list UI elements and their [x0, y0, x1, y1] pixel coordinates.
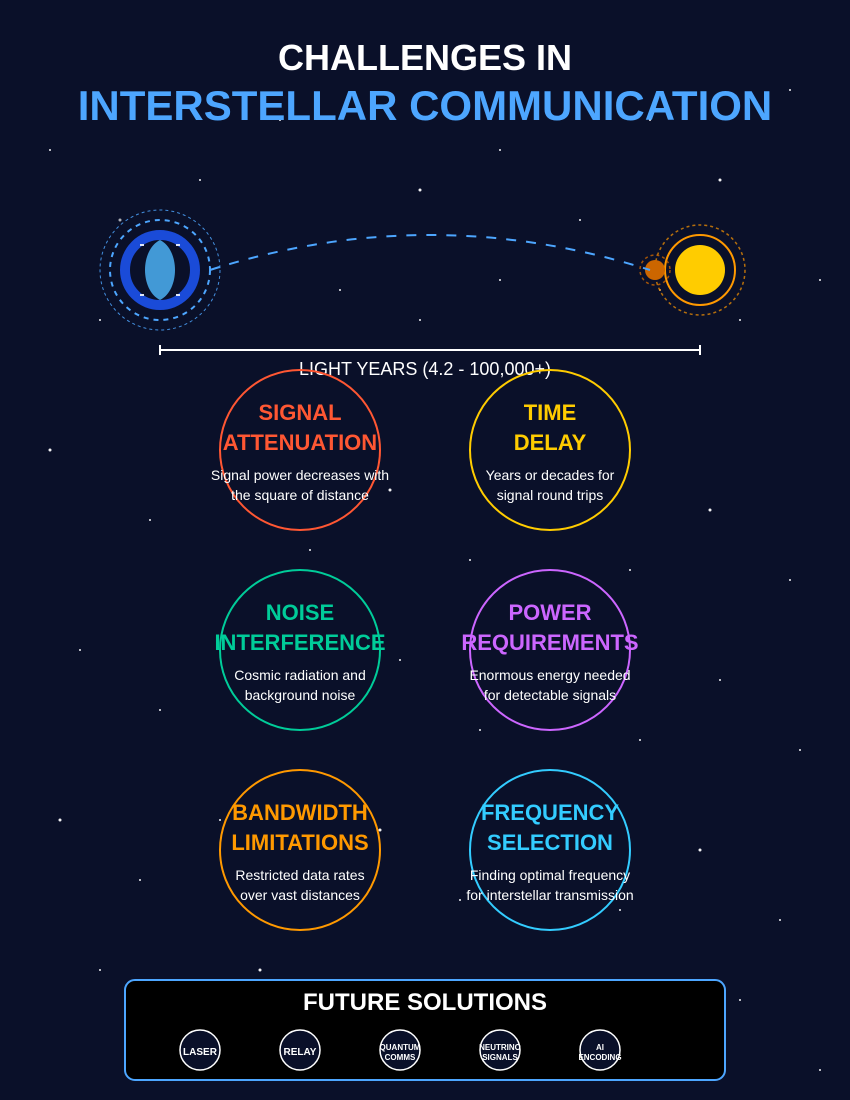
panel: bandwidth limitations: over vast distances [240, 887, 360, 903]
panel: signal attenuation: SIGNAL [258, 400, 342, 425]
panel: time delay: Years or decades for [486, 467, 615, 483]
icon: relay: RELAY [284, 1047, 317, 1058]
panel: power requirements: REQUIREMENTS [461, 630, 639, 655]
icon: star and orbiting planet [640, 225, 745, 315]
panel: time delay: DELAY [514, 430, 587, 455]
panel: time delay [470, 370, 630, 530]
icon: quantum comms: QUANTUM [380, 1043, 421, 1052]
panel: bandwidth limitations: LIMITATIONS [231, 830, 369, 855]
panel: bandwidth limitations [220, 770, 380, 930]
panel: future solutions [125, 980, 725, 1080]
panel: power requirements: Enormous energy needed [469, 667, 631, 683]
panel: time delay: TIME [524, 400, 576, 425]
panel: time delay: signal round trips [497, 487, 603, 503]
panel: frequency selection: for interstellar transmission [466, 887, 634, 903]
panel: bandwidth limitations: Restricted data rates [235, 867, 365, 883]
icon: quantum comms: COMMS [385, 1053, 416, 1062]
icon: laser: LASER [183, 1047, 218, 1058]
title: CHALLENGES IN [278, 37, 572, 78]
panel: noise interference: INTERFERENCE [214, 630, 386, 655]
icon: ai encoding: ENCODING [578, 1053, 622, 1062]
icon: neutrino signals [479, 1030, 521, 1070]
panel: bandwidth limitations: BANDWIDTH [232, 800, 368, 825]
heading: future solutions: FUTURE SOLUTIONS [303, 989, 547, 1016]
panel: frequency selection: Finding optimal frequency [470, 867, 630, 883]
panel: frequency selection [466, 770, 634, 930]
panel: power requirements [461, 570, 639, 730]
icon: ai encoding [578, 1030, 622, 1070]
arrow: signal path [209, 235, 650, 275]
icon: ai encoding: AI [596, 1043, 604, 1052]
panel: signal attenuation [211, 370, 389, 530]
icon: relay [280, 1030, 320, 1070]
panel: power requirements: POWER [508, 600, 592, 625]
panel: noise interference: Cosmic radiation and [234, 667, 366, 683]
distance scale: LIGHT YEARS (4.2 - 100,000+) [299, 359, 551, 379]
icon: neutrino signals: NEUTRINO [479, 1043, 521, 1052]
distance scale [160, 345, 700, 379]
icon: earth with signal rings [100, 210, 220, 330]
icon: quantum comms [380, 1030, 421, 1070]
panel: noise interference: NOISE [266, 600, 334, 625]
panel: frequency selection: FREQUENCY [481, 800, 619, 825]
icon: laser [180, 1030, 220, 1070]
panel: noise interference [214, 570, 386, 730]
panel: noise interference: background noise [245, 687, 355, 703]
panel: power requirements: for detectable signals [484, 687, 616, 703]
title [78, 37, 772, 129]
panel: frequency selection: SELECTION [487, 830, 613, 855]
icon: neutrino signals: SIGNALS [482, 1053, 518, 1062]
panel: signal attenuation: ATTENUATION [223, 430, 377, 455]
panel: signal attenuation: the square of distance [231, 487, 369, 503]
title: INTERSTELLAR COMMUNICATION [78, 82, 772, 129]
panel: signal attenuation: Signal power decreases with [211, 467, 389, 483]
